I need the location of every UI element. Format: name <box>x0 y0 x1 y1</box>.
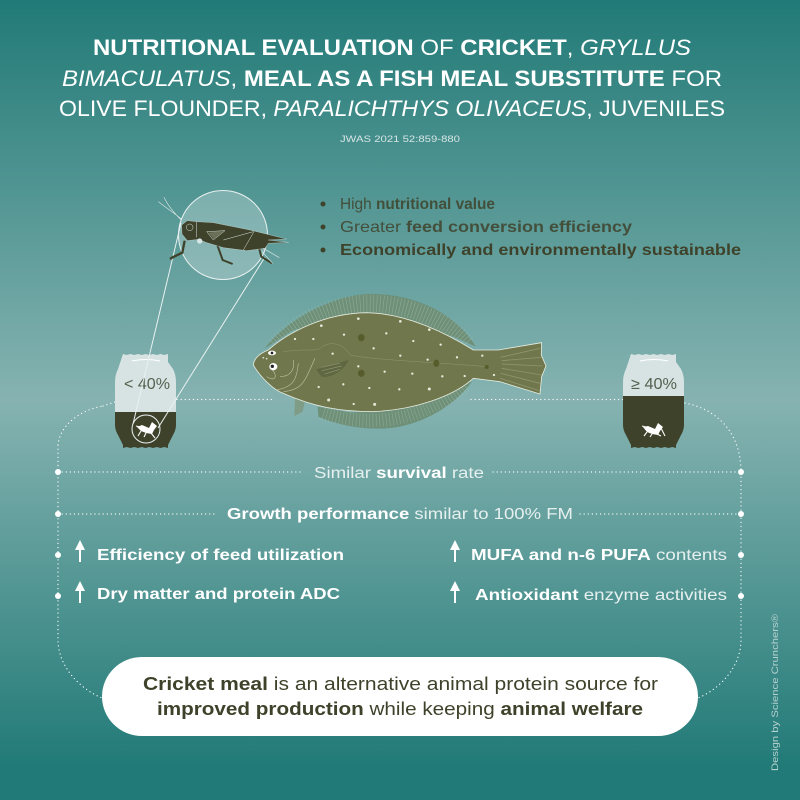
tail rays <box>500 348 543 391</box>
result: dry matter: Dry matter and protein ADC <box>97 586 340 603</box>
icon: flounder fish <box>253 294 546 429</box>
benefits list: Greater feed conversion efficiency <box>340 219 632 236</box>
result: feed efficiency: Efficiency of feed utilization <box>97 547 344 564</box>
result: growth: Growth performance similar to 100% FM <box>227 506 573 523</box>
zoom lines from badge to circle <box>133 223 265 428</box>
connector nodes <box>55 469 744 599</box>
body lines <box>283 344 487 367</box>
result: fatty acids: MUFA and n-6 PUFA contents <box>471 547 727 564</box>
icon: small cricket in badge <box>132 415 160 443</box>
result: dry matter <box>75 581 340 603</box>
label: 40 percent or more: ≥ 40% <box>631 376 677 393</box>
title: NUTRITIONAL EVALUATION OF CRICKET , GRYLLUS <box>93 35 691 60</box>
title: BIMACULATUS , MEAL AS A FISH MEAL SUBSTITUTE FOR <box>62 66 722 91</box>
benefits list: High nutritional value <box>340 196 495 213</box>
conclusion callout: Cricket meal is an alternative animal protein source for <box>143 673 658 694</box>
icon: cricket <box>158 197 289 264</box>
pectoral fin <box>294 398 306 416</box>
benefits list <box>320 196 741 259</box>
dark spots <box>358 334 489 377</box>
conclusion callout: improved production while keeping animal welfare <box>157 698 643 719</box>
upper fin <box>265 294 476 348</box>
side fin <box>316 360 349 377</box>
pale spots <box>262 317 495 406</box>
label: under 40 percent: < 40% <box>124 376 170 393</box>
result: survival: Similar survival rate <box>314 465 484 482</box>
result: fatty acids <box>450 540 727 564</box>
dotted connector frame <box>58 400 741 698</box>
conclusion callout <box>102 657 698 736</box>
result: antioxidant <box>450 581 727 604</box>
benefits list: Economically and environmentally sustainable <box>340 242 741 259</box>
result: antioxidant: Antioxidant enzyme activities <box>475 587 727 604</box>
citation: JWAS 2021 52:859-880 <box>340 134 460 145</box>
icon: bag under 40 percent <box>115 354 176 448</box>
lower fin <box>318 381 472 429</box>
title <box>59 35 725 121</box>
result: feed efficiency <box>75 540 344 564</box>
icon: bag 40 percent or more <box>623 354 684 448</box>
body <box>253 313 546 412</box>
cricket magnifier circle <box>178 190 268 280</box>
design credit: Design by Science Crunchers® <box>770 614 781 771</box>
eyes <box>268 351 276 355</box>
small cricket <box>642 423 665 437</box>
title: OLIVE FLOUNDER, PARALICHTHYS OLIVACEUS , JUVENILES <box>59 96 725 121</box>
